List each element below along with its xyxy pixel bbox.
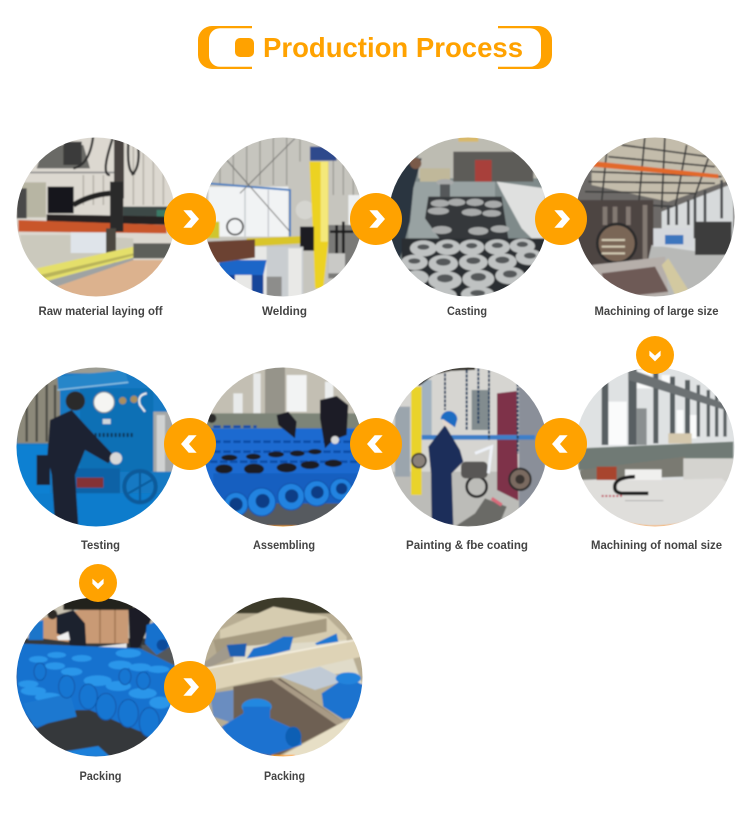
arrow: machining normal to painting	[535, 418, 587, 470]
label: Painting & fbe coating: Painting & fbe coating	[406, 538, 528, 552]
photo: packing crate	[200, 593, 367, 760]
label: Raw material laying off: Raw material laying off	[38, 304, 163, 318]
label: Welding: Welding	[262, 304, 307, 318]
arrow: raw material to welding	[164, 193, 216, 245]
photo: welding	[206, 138, 360, 296]
label: Testing: Testing	[81, 538, 120, 552]
title: Production Process: Production Process	[263, 32, 523, 63]
label: Casting: Casting	[447, 304, 487, 318]
label: Machining of large size: Machining of large size	[594, 304, 719, 318]
label: Packing left: Packing	[80, 769, 122, 783]
photo: raw material laying off	[16, 138, 174, 296]
photo: painting and fbe coating	[390, 368, 546, 526]
photo: assembling	[206, 368, 360, 526]
arrow: down to packing	[79, 564, 117, 602]
photo: packing valves	[13, 593, 180, 760]
photo: testing	[16, 368, 174, 526]
arrow: assembling to testing	[164, 418, 216, 470]
photo: machining of large size	[578, 138, 734, 296]
title: Production Process	[198, 26, 552, 69]
arrow: down to machining normal	[636, 336, 674, 374]
photo: casting	[391, 138, 546, 296]
arrow: painting to assembling	[350, 418, 402, 470]
arrow: packing to packing	[164, 661, 216, 713]
label: Packing right: Packing	[264, 769, 305, 783]
label: Machining of nomal size: Machining of nomal size	[591, 538, 722, 552]
arrow: casting to machining large	[535, 193, 587, 245]
arrow: welding to casting	[350, 193, 402, 245]
photo: machining of nomal size	[578, 368, 734, 526]
label: Assembling: Assembling	[253, 538, 315, 552]
